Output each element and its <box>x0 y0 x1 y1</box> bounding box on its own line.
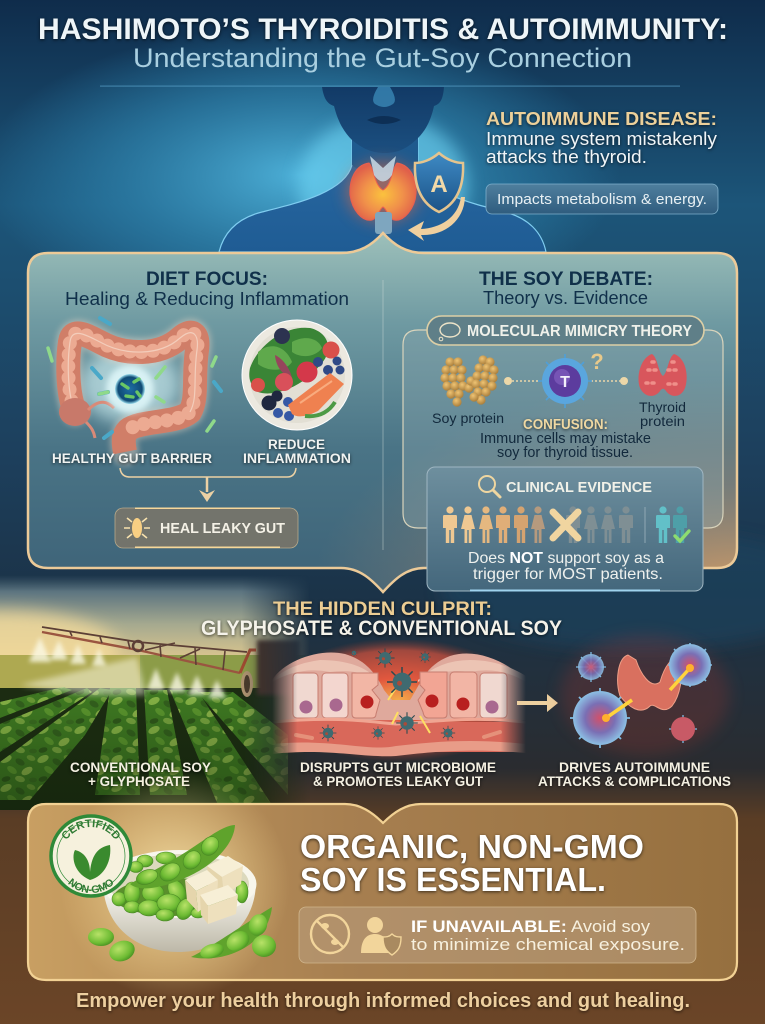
panel: diet and soy debate <box>28 233 737 592</box>
callout: if unavailable: to minimize chemical exposure. <box>411 935 685 954</box>
labels: culprit captions: ATTACKS & COMPLICATIONS <box>538 773 731 789</box>
panel: clinical evidence <box>427 467 703 592</box>
heading: diet focus: Healing & Reducing Inflammation <box>65 288 349 309</box>
lumen band <box>272 720 526 752</box>
label: soy protein: Soy protein <box>432 410 504 426</box>
icon: spark <box>124 518 150 538</box>
icon: microbe orb <box>106 365 154 413</box>
pea pod top <box>130 825 235 888</box>
icon: patient row <box>443 506 689 543</box>
text block: confusion: CONFUSION: <box>523 417 608 433</box>
epithelial cells <box>293 672 507 718</box>
arrow: merge bracket <box>120 468 296 502</box>
callout: if unavailable <box>299 907 696 963</box>
body silhouette <box>219 130 546 252</box>
heading: organic soy essential: ORGANIC, NON-GMO <box>300 828 644 865</box>
icon: T cell: T <box>560 374 570 391</box>
illustration: colon <box>48 318 221 452</box>
heading: diet focus: DIET FOCUS: <box>146 268 268 290</box>
title: HASHIMOTO’S THYROIDITIS & AUTOIMMUNITY: <box>38 13 728 46</box>
heading: hidden culprit: THE HIDDEN CULPRIT: <box>273 598 492 620</box>
yellow fissures <box>388 685 430 733</box>
text block: autoimmune disease: AUTOIMMUNE DISEASE: <box>486 108 717 129</box>
heading: soy debate: THE SOY DEBATE: <box>479 268 653 290</box>
icon: certified non-gmo seal <box>49 814 133 898</box>
icon: shield A: A <box>430 171 448 198</box>
icon: shield A <box>415 153 463 212</box>
labels: culprit captions: & PROMOTES LEAKY GUT <box>313 773 483 789</box>
text block: confusion <box>480 417 651 461</box>
title <box>38 13 728 73</box>
crop rows <box>0 687 288 803</box>
heading: soy debate: Theory vs. Evidence <box>483 288 648 308</box>
heading pill: MOLECULAR MIMICRY THEORY <box>467 323 693 340</box>
text block: autoimmune disease: Immune system mistakenly <box>486 128 718 149</box>
title: Understanding the Gut-Soy Connection <box>133 43 632 73</box>
labels: culprit captions: CONVENTIONAL SOY <box>70 759 212 775</box>
illustration: soy bowl <box>88 825 276 965</box>
footer tagline: Empower your health through informed choices and gut healing. <box>76 989 690 1012</box>
labels: culprit captions: DISRUPTS GUT MICROBIOME <box>300 759 496 775</box>
pea pod bottom <box>191 907 276 961</box>
panel: molecular mimicry <box>403 316 723 528</box>
text block: evidence conclusion: trigger for MOST patients. <box>473 566 663 583</box>
illustration: immune attack on thyroid <box>560 635 730 755</box>
text block: evidence conclusion: Does NOT support soy as a <box>468 550 664 567</box>
label: thyroid protein <box>639 399 686 429</box>
icon: thought bubble <box>439 323 460 341</box>
labels: culprit captions: + GLYPHOSATE <box>88 773 190 789</box>
labels: culprit captions: DRIVES AUTOIMMUNE <box>559 759 710 775</box>
arrow: curved <box>408 197 465 241</box>
spray cones <box>29 637 226 698</box>
icon: certified non-gmo seal: NON-GMO <box>68 878 113 893</box>
illustration: salad plate <box>242 320 352 430</box>
thyroid <box>347 156 419 234</box>
label: reduce inflammation: REDUCE <box>268 437 325 452</box>
label: thyroid protein: Thyroid <box>639 399 686 415</box>
heading: soy debate <box>479 268 653 308</box>
icon: certified non-gmo seal: CERTIFIED <box>62 819 120 838</box>
human figure with thyroid <box>100 86 680 255</box>
tofu cubes <box>185 856 243 924</box>
icon: soy protein <box>440 355 499 407</box>
arrow: to thyroid attack <box>517 694 558 712</box>
heading pill <box>427 316 704 345</box>
icon: person with shield <box>361 917 401 955</box>
text block: autoimmune disease <box>486 108 718 167</box>
face <box>322 87 444 153</box>
sprayer boom <box>42 627 247 673</box>
callout: if unavailable: IF UNAVAILABLE: Avoid soy <box>411 917 651 936</box>
label: healthy gut barrier: HEALTHY GUT BARRIER <box>52 451 212 466</box>
text block: confusion: soy for thyroid tissue. <box>497 444 633 461</box>
text block: autoimmune disease: attacks the thyroid. <box>486 146 647 167</box>
villi dome <box>272 652 526 720</box>
callout: metabolism: Impacts metabolism & energy. <box>497 192 707 208</box>
icon: T cell <box>538 349 604 408</box>
heading: organic soy essential <box>300 828 644 898</box>
illustration: damaged gut lining <box>270 638 526 762</box>
label: reduce inflammation: INFLAMMATION <box>243 451 351 466</box>
callout: metabolism <box>486 184 718 214</box>
text block: confusion: Immune cells may mistake <box>480 430 651 447</box>
panel: clinical evidence: CLINICAL EVIDENCE <box>506 480 652 496</box>
label: reduce inflammation <box>243 437 351 466</box>
icon: T cell: ? <box>590 349 604 374</box>
text block: evidence conclusion <box>468 550 664 583</box>
icon: magnifier <box>479 476 500 497</box>
labels: culprit captions <box>70 759 731 789</box>
heading: hidden culprit: GLYPHOSATE & CONVENTIONAL SOY <box>201 616 562 640</box>
callout: heal leaky gut: HEAL LEAKY GUT <box>160 520 285 537</box>
heading: diet focus <box>65 268 349 309</box>
icon: thyroid protein <box>638 354 687 396</box>
label: thyroid protein: protein <box>640 413 685 429</box>
connector lines <box>504 377 628 385</box>
panel: organic soy <box>26 776 738 992</box>
illustration: crop field and sprayer <box>0 575 310 810</box>
callout: heal leaky gut <box>115 508 298 548</box>
heading: hidden culprit <box>201 598 562 640</box>
icon: no soy <box>311 915 349 953</box>
heading: organic soy essential: SOY IS ESSENTIAL. <box>300 861 606 898</box>
